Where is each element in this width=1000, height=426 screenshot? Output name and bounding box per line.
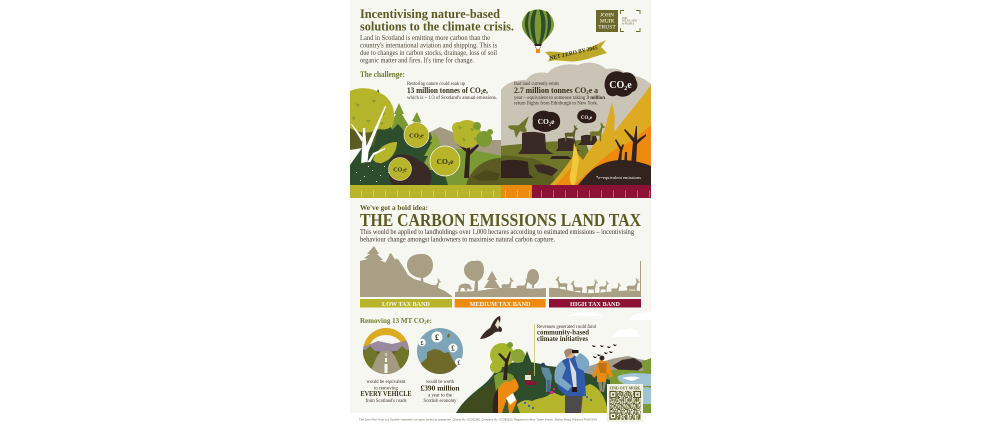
- carbon cloud: large: CO: [609, 80, 624, 91]
- text: restoring nature: [407, 81, 497, 101]
- carbon bubble: healthy land upper: 2: [419, 134, 421, 140]
- yellow lower canopy: [373, 142, 397, 164]
- logo: John Muir Trust: [596, 10, 640, 32]
- icon: globe circle with pounds: £: [457, 360, 461, 366]
- tree stumps: [518, 132, 554, 154]
- text: burnt land: Bad land currently emits: [514, 81, 559, 87]
- carbon cloud: medium: 2: [549, 122, 552, 126]
- icon: globe circle with pounds: [417, 328, 463, 374]
- lower dark bush with blossom: [350, 162, 402, 185]
- vertical rule: [533, 324, 536, 376]
- band: medium tax: MEDIUM TAX BAND: [470, 302, 531, 308]
- flock of birds: [592, 344, 617, 358]
- description of tax: This would be applied to landholdings over 1,000 hectares according to estimated emissions – incentivising: [360, 229, 635, 236]
- text: restoring nature: 2: [481, 91, 483, 96]
- carbon cloud: medium: CO: [538, 117, 549, 126]
- carbon bubble: healthy land large: [430, 146, 460, 176]
- heading: the carbon emissions land tax: THE CARBON EMISSIONS LAND TAX: [360, 210, 641, 230]
- text: every vehicle: [360, 379, 412, 404]
- carbon bubble: healthy land upper: e: [421, 132, 424, 140]
- poster background: [350, 0, 651, 413]
- clouds: [568, 312, 651, 337]
- carbon cloud: large: 2: [624, 86, 627, 92]
- panel: healthy land scene: [350, 88, 501, 185]
- title: [360, 7, 514, 34]
- text: restoring nature: 13 million tonnes of CO: [407, 86, 488, 95]
- burnt trees: [624, 126, 646, 165]
- intro text: [360, 35, 497, 64]
- heading: the challenge: The challenge:: [360, 70, 405, 79]
- band: high tax: HIGH TAX BAND: [570, 302, 621, 308]
- carbon bubble: healthy land lower: [388, 158, 412, 180]
- icon: hot air balloon: [522, 10, 554, 53]
- text: restoring nature: Restoring nature could soak up: [407, 81, 465, 87]
- text: revenues: Revenues generated could fund: [537, 323, 596, 330]
- carbon bubble: healthy land lower: CO: [393, 168, 402, 174]
- illustration: high tax band landscape: [549, 261, 641, 297]
- birch canopy: [350, 88, 394, 135]
- pines, mid green: [380, 103, 416, 145]
- birch trunk: [361, 106, 386, 167]
- band: low tax: [360, 299, 452, 308]
- heading: removing 13 MT: Removing 13 MT CO: [360, 316, 429, 325]
- carbon bubble: healthy land lower: e: [404, 168, 407, 174]
- title: Incentivising nature-based: [360, 7, 500, 21]
- illustration: medium tax band landscape: [455, 261, 546, 297]
- main hill: [456, 362, 610, 413]
- description of tax: [360, 229, 635, 244]
- intro text: country's international aviation and shipping. This is: [360, 42, 497, 50]
- carbon cloud: medium: [533, 111, 560, 132]
- footer legal text: The John Muir Trust is a Scottish charitable company limited by guarantee. Charity No. SC002061 Company No. SC081620. Registered office: Tower House, Station Road, Pitlochry PH16 5AN: [359, 418, 597, 422]
- text: burnt land: 2: [586, 91, 589, 96]
- icon: eagle: [480, 316, 502, 339]
- logo: John Muir Trust: & PEOPLE: [622, 22, 635, 25]
- right tree: [457, 137, 479, 178]
- colour scale strip: [350, 185, 651, 198]
- carbon bubble: healthy land large: CO: [437, 157, 448, 166]
- hiker: [592, 356, 613, 392]
- dark soil: [389, 154, 432, 185]
- intro text: organic matter and fires. It's time for change.: [360, 58, 474, 64]
- pine: [516, 351, 538, 380]
- logo: John Muir Trust: TRUST: [598, 24, 616, 30]
- text: every vehicle: would be equivalent: [366, 379, 406, 385]
- carbon bubble: healthy land large: e: [450, 157, 454, 166]
- subheading: bold idea: We've got a bold idea:: [360, 203, 428, 212]
- net zero banner: NET ZERO BY 2045: [549, 45, 598, 62]
- charred hill: [578, 160, 651, 185]
- carbon bubble: healthy land upper: CO: [409, 132, 419, 140]
- band: low tax: LOW TAX BAND: [382, 302, 431, 308]
- QR code panel: [607, 384, 643, 422]
- text: every vehicle: EVERY VEHICLE: [360, 390, 412, 398]
- carbon bubble: healthy land large: 2: [448, 161, 451, 166]
- icon: globe circle with pounds: £: [451, 344, 455, 352]
- text: revenues: community-based: [537, 328, 589, 336]
- dark pine and ground mass: [350, 104, 448, 185]
- flowers: [524, 396, 592, 409]
- text: 390 million: Scottish economy: [424, 398, 457, 404]
- bird silhouette, olive: [508, 116, 529, 138]
- heading: removing 13 MT: e:: [427, 316, 432, 325]
- illustration: low tax band landscape: [360, 246, 452, 297]
- mountains and loch: [585, 356, 651, 378]
- foreground yellow-green bush: [512, 384, 608, 413]
- fox: [493, 378, 519, 413]
- net zero banner: [545, 40, 607, 62]
- birdwatcher: [554, 349, 589, 413]
- distant hill: [430, 127, 501, 160]
- intro text: due to changes in carbon stocks, drainage, loss of soil: [360, 50, 497, 57]
- kneeling volunteer: [525, 371, 537, 385]
- light ground: [415, 149, 501, 185]
- text: 390 million: [420, 379, 460, 404]
- panel: community scene: [456, 342, 651, 413]
- QR code panel: FIND OUT MORE: [610, 386, 641, 390]
- carbon cloud: large: e: [627, 80, 632, 91]
- text: burnt land: 2.7 million tonnes CO: [514, 86, 588, 95]
- text: 390 million: £390 million: [420, 384, 460, 392]
- text: 390 million: would be worth: [426, 379, 454, 385]
- brown knoll: [466, 158, 501, 185]
- text: burnt land: e a: [589, 86, 598, 95]
- intro text: Land in Scotland is emitting more carbon than the: [360, 35, 490, 42]
- text: revenues: [537, 323, 596, 343]
- text: every vehicle: from Scotland's roads: [366, 397, 406, 404]
- heading: removing 13 MT: 2: [424, 321, 427, 326]
- text: revenues: climate initiatives: [537, 335, 588, 343]
- icon: globe circle with pounds: £: [435, 333, 439, 342]
- tree: [490, 343, 514, 367]
- panel: degraded land cloud background: [501, 63, 651, 185]
- carbon cloud: small: CO: [581, 116, 588, 121]
- text: 390 million: a year to the: [428, 392, 453, 398]
- text: burnt land: return flights from Edinburgh to New York.: [514, 100, 598, 106]
- panel: degraded land scene: [501, 85, 651, 185]
- carbon cloud: medium: e: [551, 117, 555, 126]
- icon: road circle: [363, 328, 409, 374]
- note: equivalent emissions: *e=equivalent emissions: [596, 176, 642, 180]
- text: burnt land: year – equivalent to someone taking 3 million: [514, 95, 605, 101]
- carbon cloud: large: [605, 71, 637, 97]
- orange flames: [556, 125, 651, 185]
- carbon bubble: healthy land lower: 2: [402, 170, 404, 174]
- title: solutions to the climate crisis.: [360, 20, 514, 34]
- band: high tax: [549, 299, 641, 308]
- text: burnt land: [514, 81, 605, 106]
- logo: John Muir Trust: MUIR: [600, 18, 615, 24]
- text: restoring nature: e,: [483, 86, 488, 95]
- carbon cloud: small: e: [590, 116, 593, 121]
- description of tax: behaviour change amongst landowners to maximise natural carbon capture.: [360, 236, 555, 244]
- standing volunteer: [541, 363, 552, 392]
- logo: John Muir Trust: JOHN: [600, 12, 614, 18]
- text: restoring nature: which is ~ 1/3 of Scotland's annual emissions.: [407, 94, 497, 101]
- deer silhouettes: [564, 124, 578, 142]
- carbon cloud: small: [577, 110, 596, 123]
- olive ground: [501, 140, 600, 185]
- yellow flames: [550, 85, 651, 185]
- band: medium tax: [455, 299, 546, 308]
- carbon cloud: small: 2: [588, 117, 590, 121]
- icon: globe circle with pounds: £: [420, 341, 424, 347]
- text: every vehicle: to removing: [374, 386, 398, 392]
- carbon bubble: healthy land upper: [404, 122, 429, 148]
- logo: John Muir Trust: WILD LAND: [622, 20, 637, 23]
- logo: John Muir Trust: FOR: [622, 17, 627, 20]
